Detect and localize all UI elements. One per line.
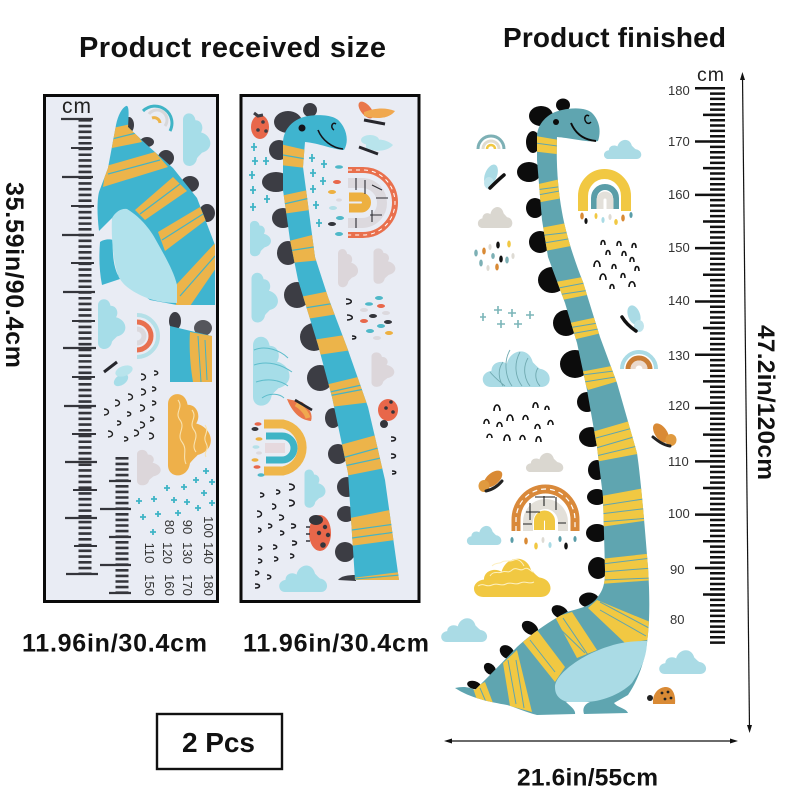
ladybug bottom bbox=[306, 515, 331, 551]
plus marks bbox=[249, 143, 327, 227]
ruler number labels: 100 bbox=[201, 516, 216, 538]
scattered arcs bbox=[255, 299, 396, 588]
dinosaur body piece bbox=[98, 106, 216, 306]
butterfly orange lower bbox=[287, 399, 312, 421]
quantity badge bbox=[157, 714, 282, 769]
scale numbers: 160 bbox=[668, 187, 690, 202]
title: product finished: Product finished bbox=[503, 22, 726, 53]
rainbow: yellow bbox=[583, 174, 626, 211]
colored drops under rainbow bbox=[580, 212, 633, 225]
scattered arcs upper bbox=[594, 240, 639, 289]
scattered arcs bbox=[104, 371, 158, 441]
scale numbers: 100 bbox=[668, 506, 690, 521]
panel: second sticker sheet bbox=[241, 96, 419, 602]
colored drops bbox=[474, 240, 515, 271]
scale numbers: 110 bbox=[668, 454, 689, 469]
ruler: long strip bbox=[61, 95, 98, 577]
scale numbers: 150 bbox=[668, 240, 690, 255]
cloud: bottom bbox=[279, 566, 327, 592]
title: product received size: Product received size bbox=[79, 32, 386, 64]
ladybug top bbox=[251, 113, 269, 139]
rainbow: orange with grid bbox=[516, 489, 575, 531]
ruler number labels: 170 bbox=[180, 574, 195, 596]
arrow: vertical dimension bbox=[740, 72, 752, 733]
ruler number labels: 150 bbox=[142, 574, 157, 596]
body offcut piece bbox=[169, 312, 212, 382]
rainbow: coral bbox=[137, 315, 158, 357]
cloud: striped blue bbox=[253, 337, 292, 406]
finished product: dinosaur bbox=[455, 98, 655, 715]
ladybug bbox=[647, 687, 675, 704]
cloud: grey left bbox=[478, 207, 512, 228]
butterfly bbox=[104, 362, 134, 389]
rainbow: yellow with teal bbox=[264, 424, 302, 471]
dinosaur spikes bbox=[466, 98, 608, 691]
butterfly: blue right bbox=[622, 304, 644, 332]
scale numbers: 120 bbox=[668, 398, 690, 413]
ruler number labels: 160 bbox=[162, 574, 177, 596]
colored dots yellow rainbow bbox=[252, 422, 264, 477]
dimension label: sheet 1 width: 11.96in/30.4cm bbox=[22, 630, 207, 658]
dinosaur face bbox=[299, 123, 343, 149]
scale numbers bbox=[668, 83, 690, 627]
clouds: blue left bbox=[250, 221, 278, 323]
dimension label: sheet 2 width: 11.96in/30.4cm bbox=[243, 630, 429, 658]
cloud: blue top right bbox=[604, 140, 641, 159]
ruler: finished product bbox=[668, 64, 724, 646]
ruler: short strip bbox=[100, 457, 131, 597]
butterfly orange bbox=[356, 99, 395, 124]
clouds: grey bbox=[338, 248, 395, 387]
rainbow: top bbox=[143, 106, 172, 131]
centimetre unit: cm bbox=[697, 64, 724, 86]
ruler number labels bbox=[142, 516, 216, 596]
scale numbers: 90 bbox=[670, 562, 684, 577]
cloud: orange patterned bbox=[168, 394, 211, 475]
dinosaur long neck bbox=[280, 115, 400, 582]
scale numbers: 80 bbox=[670, 612, 684, 627]
cloud: light blue bbox=[98, 299, 125, 349]
colored dots near rainbow bbox=[328, 165, 344, 236]
plus marks bbox=[136, 468, 215, 535]
cloud: blue lower left bbox=[441, 618, 487, 642]
arrow: horizontal dimension bbox=[444, 738, 738, 744]
dinosaur face bbox=[553, 115, 596, 141]
colored dots right bbox=[360, 296, 393, 340]
scale numbers: 180 bbox=[668, 83, 690, 98]
cloud: yellow patterned bbox=[474, 559, 551, 597]
ruler: long strip: cm bbox=[62, 95, 91, 118]
ruler number labels: 120 bbox=[160, 542, 175, 564]
butterfly: orange left bbox=[478, 467, 505, 492]
butterfly: blue top bbox=[481, 163, 504, 189]
dimension label: finished height: 47.2in/120cm bbox=[752, 325, 779, 480]
cloud: blue left small bbox=[467, 526, 501, 545]
cloud: grey bbox=[137, 450, 161, 485]
cloud: small blue bbox=[304, 469, 325, 508]
cloud: top right bbox=[183, 113, 210, 166]
dimension label: sheet height: 35.59in/90.4cm bbox=[0, 182, 28, 368]
ruler number labels: 90 bbox=[180, 520, 195, 534]
butterfly: orange right bbox=[650, 421, 676, 446]
dinosaur spikes bbox=[262, 103, 357, 581]
ruler number labels: 80 bbox=[162, 520, 177, 534]
colored drops under rainbow bbox=[510, 536, 577, 550]
panel: first sticker sheet bbox=[44, 95, 218, 602]
dinosaur body bbox=[455, 108, 649, 715]
cloud: striped blue bbox=[483, 350, 550, 387]
cloud: grey centre bbox=[526, 453, 563, 472]
scale numbers: 170 bbox=[668, 134, 690, 149]
scale numbers: 140 bbox=[668, 293, 690, 308]
quantity badge: 2 Pcs bbox=[182, 727, 255, 758]
rainbow: small teal bbox=[478, 136, 504, 149]
cloud: blue lower right bbox=[659, 650, 706, 674]
ruler number labels: 140 bbox=[201, 542, 216, 564]
ruler number labels: 180 bbox=[201, 574, 216, 596]
scattered arcs lower bbox=[484, 403, 553, 442]
ladybug right bbox=[378, 399, 398, 428]
plus marks bbox=[480, 306, 534, 328]
dimension label: finished width: 21.6in/55cm bbox=[517, 764, 658, 792]
rainbow: coral with grey grid bbox=[348, 170, 395, 235]
rainbow: orange small bbox=[622, 352, 656, 369]
ruler number labels: 110 bbox=[142, 543, 157, 563]
yellow stripes bbox=[473, 135, 655, 712]
butterfly blue bbox=[359, 135, 393, 154]
scale numbers: 130 bbox=[668, 348, 690, 363]
ruler number labels: 130 bbox=[180, 542, 195, 564]
light belly bbox=[555, 641, 647, 702]
